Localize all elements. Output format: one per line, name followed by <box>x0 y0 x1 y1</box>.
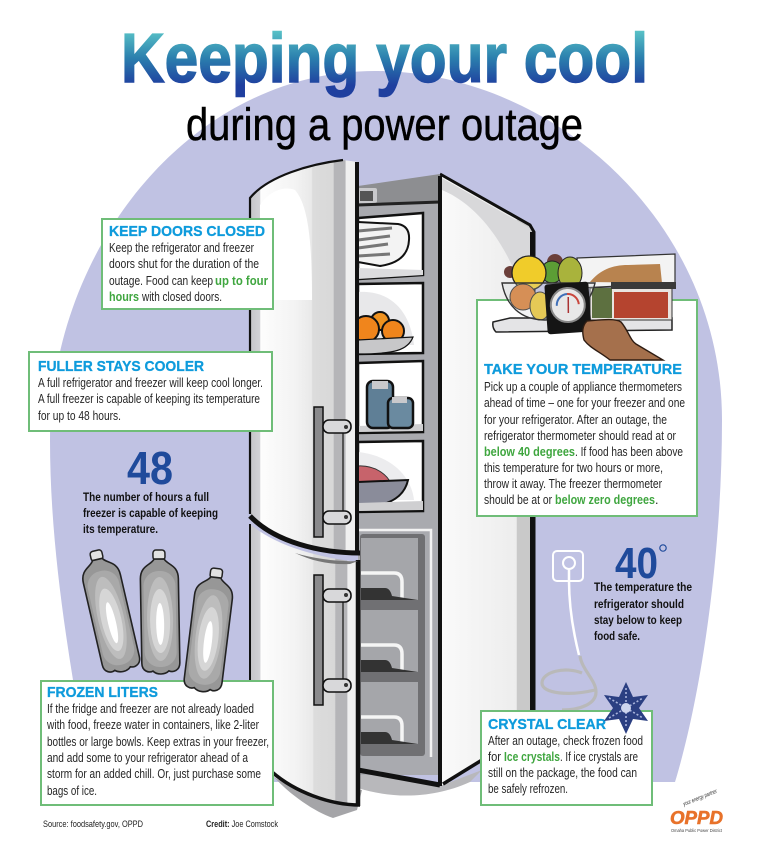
body text: crystal clear: After an outage, check frozen food <box>488 734 643 748</box>
source credit: Source: foodsafety.gov, OPPD <box>43 819 143 830</box>
lower door handle <box>314 575 351 705</box>
body text: frozen liters <box>46 702 269 798</box>
logo: OPPD: Omaha Public Power District <box>671 828 723 833</box>
illustration: food and thermometer on shelf <box>493 254 676 360</box>
body text: fuller stays cooler <box>38 376 263 423</box>
body text: take your temperature: this temperature for two hours or more, <box>484 461 663 475</box>
upper door <box>250 160 360 553</box>
freezer drawers <box>358 530 431 757</box>
body text: crystal clear: be safely refrozen. <box>488 782 568 796</box>
body text: take your temperature: . <box>655 493 658 507</box>
panel: fuller stays cooler <box>29 352 272 431</box>
body text: take your temperature: Pick up a couple of appliance thermometers <box>484 380 682 394</box>
shelf: meat in bowl <box>358 441 423 512</box>
body text: frozen liters: with food, freeze water in containers, like 2-liter <box>46 718 259 732</box>
body text: frozen liters: and add some to your refrigerator ahead of a <box>47 751 248 765</box>
body text: take your temperature: for your refrigerator. After an outage, the <box>484 413 667 427</box>
body text: frozen liters: storm for an added chill. Or, just purchase some <box>47 767 261 781</box>
panel: frozen liters <box>41 681 273 805</box>
body text: keep doors closed: Keep the refrigerator and freezer <box>109 241 254 255</box>
icon: frozen water bottles <box>77 546 236 694</box>
stat caption: 40 degrees <box>594 580 692 643</box>
body text: fuller stays cooler: for up to 48 hours. <box>38 409 121 423</box>
heading: frozen liters: FROZEN LITERS <box>47 684 158 701</box>
container with roast <box>577 254 676 320</box>
hand <box>583 320 663 360</box>
body text: keep doors closed: hours <box>109 290 139 304</box>
body text: frozen liters: bags of ice. <box>47 784 97 798</box>
logo: OPPD <box>670 789 723 833</box>
body text: take your temperature: ahead of time – one for your freezer and one <box>484 396 685 410</box>
stat caption: 48 hours: its temperature. <box>83 522 158 536</box>
shelf: oranges on plate <box>353 283 423 354</box>
stat caption: 40 degrees: stay below to keep <box>594 613 682 627</box>
lower door <box>250 524 360 806</box>
stat: 48 hours <box>83 442 218 536</box>
stat: 40 degrees: 40 <box>615 539 658 588</box>
body text: take your temperature <box>484 380 685 507</box>
stat caption: 40 degrees: refrigerator should <box>594 597 684 611</box>
fridge interior <box>353 174 442 786</box>
body text: take your temperature: below zero degrees <box>555 493 655 507</box>
panel: keep doors closed <box>102 219 273 309</box>
body text: crystal clear: for <box>488 750 501 764</box>
body text: take your temperature: throw it away. The freezer thermometer <box>484 477 662 491</box>
body text: crystal clear: still on the package, the food can <box>488 766 637 780</box>
panel: take your temperature <box>477 300 697 516</box>
stat: 40 degrees <box>594 539 692 643</box>
background blob <box>50 71 722 782</box>
body text: crystal clear: . If ice crystals are <box>560 750 638 764</box>
stat caption: 48 hours <box>83 490 218 536</box>
thermometer <box>544 282 592 334</box>
body text: take your temperature: below 40 degrees <box>484 445 575 459</box>
body text: fuller stays cooler: A full freezer is capable of keeping its temperature <box>38 392 260 406</box>
stat: 48 hours: 48 <box>127 442 173 494</box>
body text: frozen liters: bottles or large bowls. Keep extras in your freezer, <box>47 735 269 749</box>
body text: frozen liters: If the fridge and freezer are not already loaded <box>47 702 254 716</box>
photo credit: Credit: Joe Comstock <box>206 819 278 830</box>
stat caption: 48 hours: freezer is capable of keeping <box>83 506 218 520</box>
panel: crystal clear <box>481 711 652 805</box>
body text: fuller stays cooler: A full refrigerator and freezer will keep cool longer. <box>38 376 263 390</box>
heading: fuller stays cooler: FULLER STAYS COOLER <box>38 358 204 375</box>
fridge body side <box>440 174 535 784</box>
stat caption: 40 degrees: The temperature the <box>594 580 692 594</box>
body text: keep doors closed: with closed doors. <box>141 290 222 304</box>
body text: keep doors closed: outage. Food can keep <box>109 274 213 288</box>
body text: keep doors closed: doors shut for the duration of the <box>109 257 259 271</box>
body text: crystal clear <box>488 734 643 796</box>
stat caption: 48 hours: The number of hours a full <box>83 490 209 504</box>
body text: take your temperature: should be at or <box>484 493 552 507</box>
heading: take your temperature: TAKE YOUR TEMPERATURE <box>484 361 682 378</box>
shelf: jars <box>358 361 423 433</box>
upper door handle <box>314 407 351 537</box>
bowl of fruit <box>502 254 595 320</box>
logo: OPPD: OPPD <box>670 808 723 828</box>
body text: take your temperature: refrigerator thermometer should read at or <box>484 429 676 443</box>
logo: OPPD: your energy partner <box>682 789 719 808</box>
heading: crystal clear: CRYSTAL CLEAR <box>488 716 606 733</box>
title: Keeping your cool <box>121 19 648 97</box>
body text: keep doors closed: up to four <box>215 274 268 288</box>
shelf: fan vent <box>358 213 423 279</box>
body text: take your temperature: . If food has been above <box>575 445 683 459</box>
icon: power cord and outlet <box>542 551 596 710</box>
icon: snowflake <box>604 682 648 734</box>
refrigerator <box>250 160 535 818</box>
body text: crystal clear: Ice crystals <box>504 750 560 764</box>
stat caption: 40 degrees: food safe. <box>594 629 640 643</box>
subtitle: during a power outage <box>186 99 583 150</box>
body text: keep doors closed <box>109 241 268 304</box>
heading: keep doors closed: KEEP DOORS CLOSED <box>109 223 265 240</box>
